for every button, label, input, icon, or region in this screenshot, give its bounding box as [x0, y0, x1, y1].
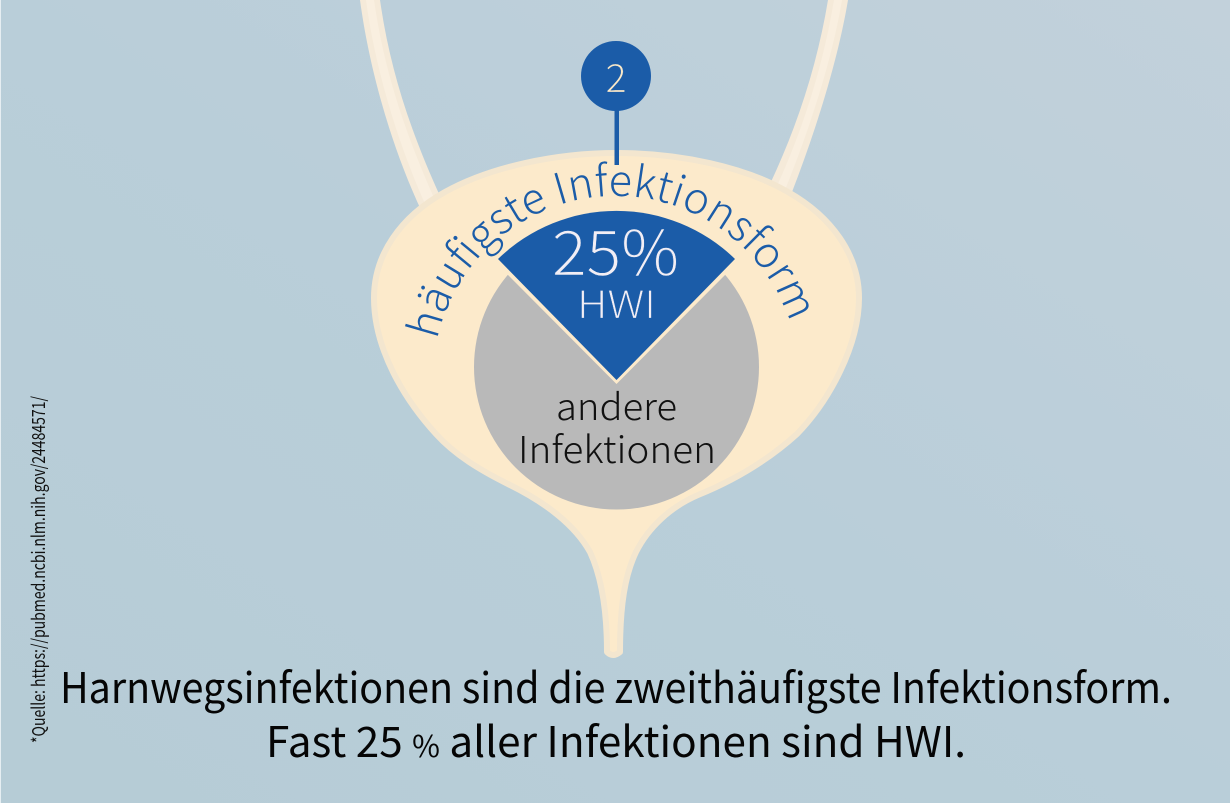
headline: Fast 25 % aller Infektionen sind HWI. [266, 709, 966, 770]
bladder [374, 153, 859, 655]
label: andere Infektionen [518, 377, 716, 474]
HWI slice [498, 211, 735, 380]
right ureter [770, 0, 848, 192]
left ureter [360, 0, 440, 212]
marker line [614, 110, 619, 165]
label: HWI: HWI [577, 274, 656, 329]
label: andere Infektionen: Infektionen [518, 420, 716, 474]
number badge [581, 41, 651, 111]
headline: Harnwegsinfektionen sind die zweithäufigste Infektionsform. [60, 655, 1172, 716]
headline [60, 655, 1172, 770]
number badge: 2 [606, 48, 626, 104]
slice gap [490, 235, 743, 384]
label: andere Infektionen: andere [556, 377, 677, 431]
other infections slice [474, 224, 759, 510]
curved label: häufigste Infektionsform [405, 161, 809, 336]
pie chart [474, 211, 759, 509]
source note: *Quelle: https://pubmed.ncbi.nlm.nih.gov/24484571/ [25, 396, 51, 743]
value: 25%: 25% [552, 203, 679, 293]
